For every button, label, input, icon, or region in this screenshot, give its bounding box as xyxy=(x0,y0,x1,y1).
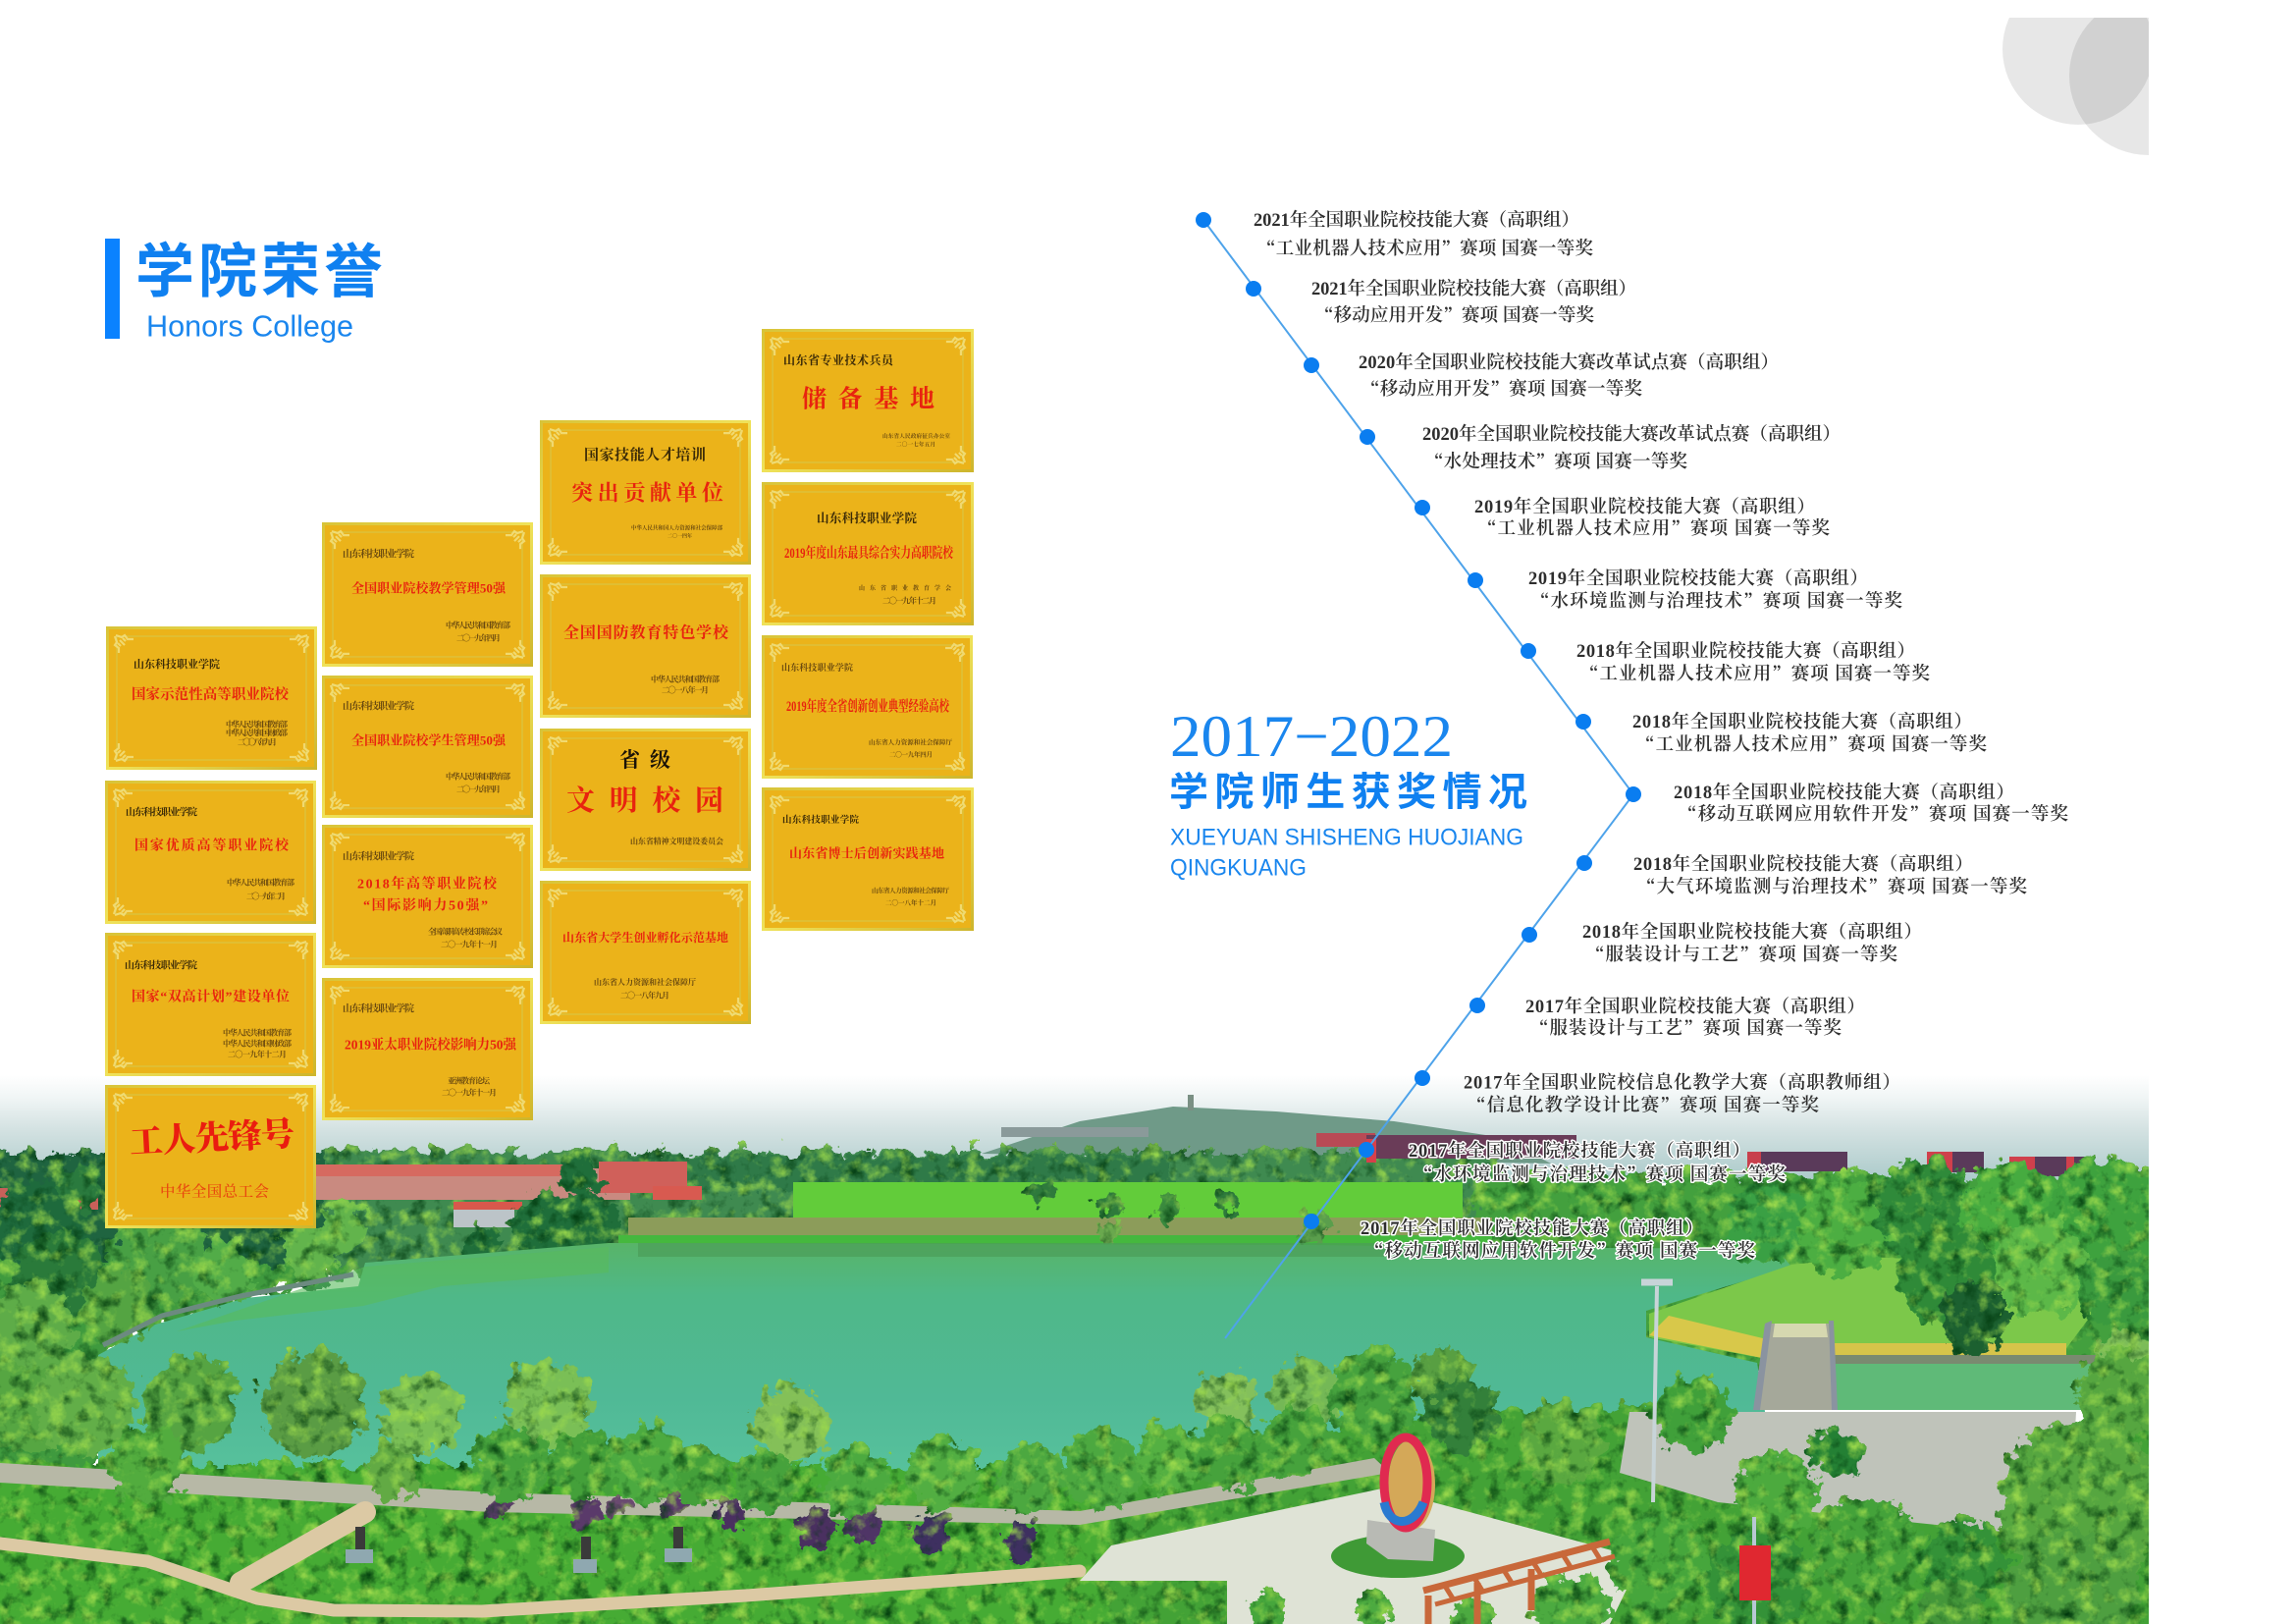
plaque: 国际影响力50强: “国际影响力50强” xyxy=(363,897,488,913)
plaque: 2019年度全省创新创业典型经验高校: 山东省人力资源和社会保障厅 xyxy=(869,737,952,746)
statues xyxy=(355,1527,683,1562)
award 4 xyxy=(1360,423,1841,475)
plaque: 全国职业院校教学管理50强: 中华人民共和国教育部 xyxy=(446,621,510,630)
plaque: 山东省博士后创新实践基地: 山东科技职业学院 xyxy=(782,814,859,826)
distant tree band xyxy=(0,1151,2179,1370)
campus photograph background xyxy=(0,1075,2179,1624)
red campus buildings xyxy=(1316,1133,2093,1176)
award 2 xyxy=(1246,278,1636,329)
plaque: 2019年度全省创新创业典型经验高校: 二〇一九年四月 xyxy=(889,750,933,758)
plaque: 2019年度全省创新创业典型经验高校: 2019年度全省创新创业典型经验高校 xyxy=(786,697,950,715)
plaque: 全国职业院校教学管理50强: 全国职业院校教学管理50强 xyxy=(351,581,507,595)
right and foreground ground base xyxy=(0,1404,2179,1624)
plaque: 储备基地 xyxy=(762,329,974,472)
award 3: 2020年全国职业院校技能大赛改革试点赛（高职组） xyxy=(1359,352,1779,373)
plaque: 山东省博士后创新实践基地: 山东省博士后创新实践基地 xyxy=(789,846,944,860)
award 10 xyxy=(1576,853,2027,900)
plaque: 2019年度山东最具综合实力高职院校 xyxy=(762,482,974,625)
award 12: 2017年全国职业院校技能大赛（高职组） xyxy=(1525,996,1865,1017)
bright green fields xyxy=(618,1182,1492,1249)
plaque: 2019年度山东最具综合实力高职院校: 山东省职业教育学会 xyxy=(859,584,951,592)
lake xyxy=(98,1243,2096,1502)
plaque: 全国职业院校教学管理50强: 二〇一九年四月 xyxy=(456,632,501,642)
plaque: 国际影响力50强: 2018年高等职业院校 xyxy=(357,876,498,892)
plaque: 国家示范性高等职业院校: 二〇〇八年九月 xyxy=(238,736,277,746)
award 6: 2019年全国职业院校技能大赛（高职组） xyxy=(1528,568,1868,589)
plaque: 国际影响力50强: 二〇一九年十一月 xyxy=(441,939,498,948)
award 10: “大气环境监测与治理技术”赛项 国赛一等奖 xyxy=(1637,875,2027,900)
year range: 2017−2022 xyxy=(1170,704,1453,769)
plaque: 国家双高计划建设单位: 山东科技职业学院 xyxy=(125,958,197,972)
plaque: 2019年度山东最具综合实力高职院校: 二〇一九年十二月 xyxy=(882,595,936,605)
plaque: 国家优质高等职业院校: 中华人民共和国教育部 xyxy=(227,878,294,888)
heading: 2017-2022 学院师生获奖情况 xyxy=(1169,704,1527,882)
award 12 xyxy=(1469,996,1865,1042)
plaque: 国家示范性高等职业院校 xyxy=(106,626,317,770)
stepped bridge xyxy=(1753,1321,1838,1410)
lower left green base xyxy=(0,1259,360,1468)
wooden pergola xyxy=(1423,1542,1615,1624)
far grey building xyxy=(1001,1095,1194,1137)
award 5: 2019年全国职业院校技能大赛（高职组） xyxy=(1474,496,1815,517)
plaque: 全国国防教育特色学校: 二〇一八年一月 xyxy=(662,685,709,695)
award 13: 2017年全国职业院校信息化教学大赛（高职教师组） xyxy=(1464,1072,1900,1094)
sculpture xyxy=(1331,1437,1465,1578)
award 1 xyxy=(1196,209,1593,262)
award 10: 2018年全国职业院校技能大赛（高职组） xyxy=(1633,853,1973,875)
plaque: 山东省大学生创业孵化示范基地: 山东省大学生创业孵化示范基地 xyxy=(562,930,728,945)
award 13: “信息化教学设计比赛”赛项 国赛一等奖 xyxy=(1468,1094,1819,1119)
plaque: 国家优质高等职业院校: 山东科技职业学院 xyxy=(126,805,197,819)
plaque: 2019年度全省创新创业典型经验高校: 山东科技职业学院 xyxy=(781,662,853,673)
plaque: 2019亚太职业院校影响力50强: 二〇一九年十一月 xyxy=(442,1088,497,1098)
award 12: “服装设计与工艺”赛项 国赛一等奖 xyxy=(1530,1016,1842,1042)
award 13 xyxy=(1415,1070,1900,1119)
plaque: 山东省大学生创业孵化示范基地: 二〇一八年九月 xyxy=(620,990,669,1000)
plaque: 全国职业院校学生管理50强: 全国职业院校学生管理50强 xyxy=(351,732,507,748)
award 9: “移动互联网应用软件开发”赛项 国赛一等奖 xyxy=(1679,802,2068,828)
plaque: 全国国防教育特色学校: 全国国防教育特色学校 xyxy=(563,623,730,642)
award 4: “水处理技术”赛项 国赛一等奖 xyxy=(1425,450,1687,475)
plaque: 2019亚太职业院校影响力50强: 山东科技职业学院 xyxy=(343,1001,414,1015)
award 9: 2018年全国职业院校技能大赛（高职组） xyxy=(1674,782,2014,803)
plaque: 国家双高计划建设单位: 中华人民共和国财政部 xyxy=(223,1039,292,1049)
red banner xyxy=(1739,1545,1771,1600)
left shore trees xyxy=(0,1164,367,1369)
award 3: “移动应用开发”赛项 国赛一等奖 xyxy=(1362,377,1642,403)
plaque: 全国国防教育特色学校: 中华人民共和国教育部 xyxy=(651,674,720,683)
plaque: 2019亚太职业院校影响力50强: 2019亚太职业院校影响力50强 xyxy=(345,1037,518,1053)
award 8: 2018年全国职业院校技能大赛（高职组） xyxy=(1632,711,1972,732)
Chinese heading: 学院师生获奖情况 xyxy=(1169,771,1527,814)
plaque: 全国职业院校学生管理50强: 中华人民共和国教育部 xyxy=(446,772,510,782)
title Chinese: 学院荣誉 xyxy=(135,240,383,304)
award 5: “工业机器人技术应用”赛项 国赛一等奖 xyxy=(1478,516,1830,542)
trees and lawn on right island xyxy=(1649,1257,2096,1364)
plaque: 国家双高计划建设单位: 中华人民共和国教育部 xyxy=(223,1027,292,1037)
plaque: 全国职业院校学生管理50强: 山东科技职业学院 xyxy=(343,699,414,713)
award 2: “移动应用开发”赛项 国赛一等奖 xyxy=(1315,303,1594,329)
lamp posts xyxy=(1641,1282,1754,1624)
plaque: 工人先锋号: 中华全国总工会 xyxy=(160,1182,269,1200)
plaque: 工人先锋号: 工人先锋号 xyxy=(129,1115,295,1162)
title English: Honors College xyxy=(146,308,353,344)
plaque: 山东省博士后创新实践基地: 二〇一八年十二月 xyxy=(885,897,936,907)
award 14 xyxy=(1359,1140,1786,1188)
plaque: 省级文明校园 xyxy=(540,729,751,871)
plaque: 储备基地: 山东省专业技术兵员 xyxy=(783,352,895,367)
tree clusters behind lake xyxy=(463,1154,1331,1263)
plaque: 突出贡献单位: 国家技能人才培训 xyxy=(584,446,706,463)
plaque: 2019亚太职业院校影响力50强: 亚洲教育论坛 xyxy=(448,1076,491,1086)
plaque: 突出贡献单位: 二〇一四年 xyxy=(667,532,692,540)
plaque: 省级文明校园: 山东省精神文明建设委员会 xyxy=(630,837,723,846)
plaque: 全国职业院校学生管理50强: 二〇一九年四月 xyxy=(456,784,501,793)
plaque: 储备基地: 二〇一七年五月 xyxy=(896,440,935,448)
decorative grey circles top right xyxy=(2002,18,2149,155)
award 7 xyxy=(1521,640,1930,687)
plaque: 国际影响力50强: 山东科技职业学院 xyxy=(343,850,414,862)
award 15: 2017年全国职业院校技能大赛（高职组） xyxy=(1361,1218,1703,1239)
award 5 xyxy=(1415,496,1830,542)
sky fade xyxy=(0,1088,2149,1183)
pinyin line 2: QINGKUANG xyxy=(1170,854,1307,882)
award 4: 2020年全国职业院校技能大赛改革试点赛（高职组） xyxy=(1422,423,1841,445)
award 11 xyxy=(1522,921,1922,968)
plaque: 山东省博士后创新实践基地: 山东省人力资源和社会保障厅 xyxy=(872,886,950,894)
plaque: 国家优质高等职业院校: 二〇一九年二月 xyxy=(246,892,286,901)
award 14: 2017年全国职业院校技能大赛（高职组） xyxy=(1409,1140,1750,1162)
lake walkway edge xyxy=(103,1274,353,1345)
plaque: 国家示范性高等职业院校: 国家示范性高等职业院校 xyxy=(132,685,291,703)
award 8 xyxy=(1575,711,1987,758)
award 8: “工业机器人技术应用”赛项 国赛一等奖 xyxy=(1636,732,1987,758)
award 6: “水环境监测与治理技术”赛项 国赛一等奖 xyxy=(1531,589,1902,615)
plaque: 储备基地: 储备基地 xyxy=(802,385,934,412)
plaque: 国家示范性高等职业院校: 山东科技职业学院 xyxy=(133,657,220,671)
award 11: “服装设计与工艺”赛项 国赛一等奖 xyxy=(1586,943,1897,968)
plaque: 突出贡献单位: 突出贡献单位 xyxy=(571,481,723,505)
purple flowering trees xyxy=(489,1495,1041,1559)
plaque: 国家示范性高等职业院校: 中华人民共和国教育部 xyxy=(226,719,288,729)
plaque: 全国职业院校学生管理50强 xyxy=(322,676,533,818)
plaque: 国家优质高等职业院校: 国家优质高等职业院校 xyxy=(134,837,290,854)
plaque: 国际影响力50强 xyxy=(322,825,533,968)
bottom right large trees xyxy=(1247,1351,2163,1624)
plaza xyxy=(1620,1412,2076,1532)
plaque: 2019年度全省创新创业典型经验高校 xyxy=(762,635,973,779)
plaque: 山东省博士后创新实践基地 xyxy=(762,787,974,931)
distant hill xyxy=(982,1107,1551,1164)
plaque: 全国职业院校教学管理50强: 山东科技职业学院 xyxy=(343,548,414,560)
award 7: “工业机器人技术应用”赛项 国赛一等奖 xyxy=(1580,662,1930,687)
award 7: 2018年全国职业院校技能大赛（高职组） xyxy=(1576,640,1915,662)
award 15: “移动互联网应用软件开发”赛项 国赛一等奖 xyxy=(1365,1239,1755,1265)
plaque: 山东省大学生创业孵化示范基地 xyxy=(540,881,751,1024)
plaque: 省级文明校园: 文明校园 xyxy=(566,785,723,817)
plaque: 2019年度山东最具综合实力高职院校: 2019年度山东最具综合实力高职院校 xyxy=(784,544,954,562)
red roofed village xyxy=(0,1162,702,1227)
section title: 学院荣誉 Honors College xyxy=(105,239,383,344)
award 1: “工业机器人技术应用”赛项 国赛一等奖 xyxy=(1257,237,1593,262)
plaque: 国家双高计划建设单位: 国家“双高计划”建设单位 xyxy=(132,988,290,1005)
plaque: 国家优质高等职业院校 xyxy=(105,781,316,924)
plaque: 国际影响力50强: 全国高职高专校长联席会议 xyxy=(428,927,503,937)
plaque: 储备基地: 山东省人民政府征兵办公室 xyxy=(882,432,950,440)
award 6 xyxy=(1468,568,1902,615)
plaque: 国家双高计划建设单位: 二〇一九年十二月 xyxy=(228,1049,287,1058)
award 15 xyxy=(1304,1214,1755,1265)
plaque: 国家示范性高等职业院校: 中华人民共和国财政部 xyxy=(226,728,288,737)
plaque: 省级文明校园: 省 级 xyxy=(619,748,670,772)
beige footpaths xyxy=(0,1512,1080,1611)
white paved square xyxy=(1080,1489,1638,1624)
award 9 xyxy=(1626,782,2068,828)
award 14: “水环境监测与治理技术”赛项 国赛一等奖 xyxy=(1415,1163,1786,1188)
plaque: 突出贡献单位 xyxy=(540,420,751,565)
award 3 xyxy=(1304,352,1779,403)
plaque: 2019亚太职业院校影响力50强 xyxy=(322,978,533,1120)
pinyin line 1: XUEYUAN SHISHENG HUOJIANG xyxy=(1170,825,1523,850)
plaque: 山东省大学生创业孵化示范基地: 山东省人力资源和社会保障厅 xyxy=(594,977,696,987)
blue accent bar xyxy=(105,239,120,339)
front walkway xyxy=(0,1458,1390,1525)
award 2: 2021年全国职业院校技能大赛（高职组） xyxy=(1311,278,1636,299)
plaque: 工人先锋号 xyxy=(105,1085,316,1228)
awards timeline xyxy=(1196,209,2068,1338)
award 1: 2021年全国职业院校技能大赛（高职组） xyxy=(1254,209,1579,231)
plaque: 全国国防教育特色学校 xyxy=(540,574,751,718)
lakeside tree row xyxy=(0,1330,1731,1518)
plaque: 2019年度山东最具综合实力高职院校: 山东科技职业学院 xyxy=(817,511,917,525)
award 11: 2018年全国职业院校技能大赛（高职组） xyxy=(1582,921,1922,943)
plaque: 突出贡献单位: 中华人民共和国人力资源和社会保障部 xyxy=(631,524,723,532)
plaque: 全国职业院校教学管理50强 xyxy=(322,522,533,667)
plaque: 国家双高计划建设单位 xyxy=(105,933,316,1076)
timeline line xyxy=(1203,220,1633,1338)
